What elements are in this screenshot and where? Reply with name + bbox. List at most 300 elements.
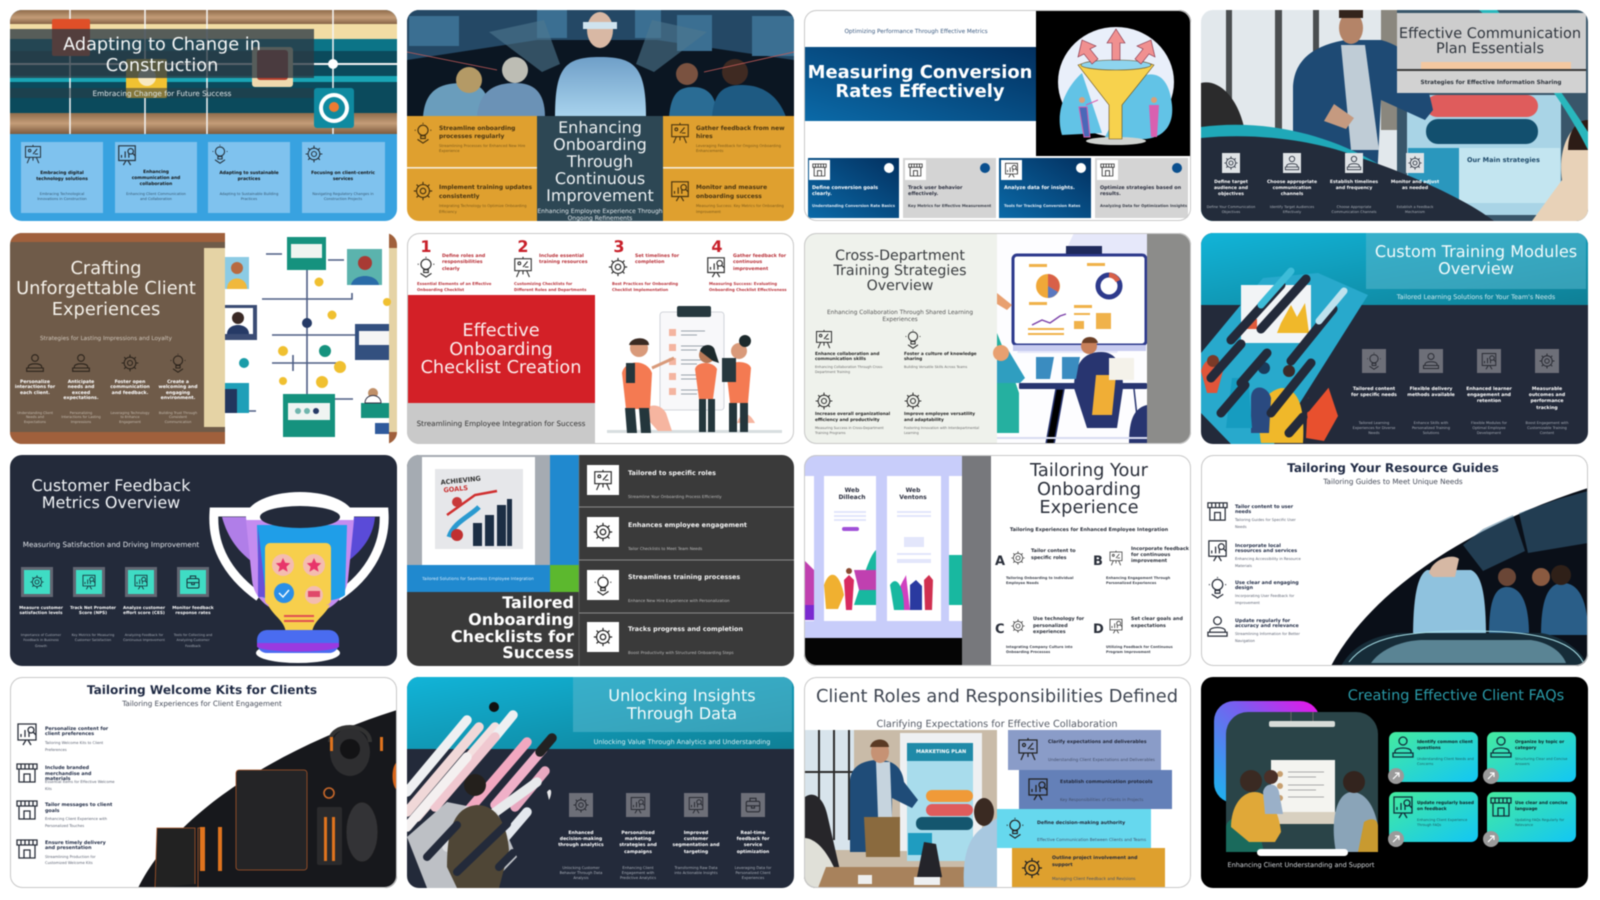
panel: training strategies: Training Programs [814,431,846,435]
title overlay: Embracing Change for Future Success [93,89,232,98]
panel: right steps: hires [696,133,713,140]
list: guide tips: Improvement [1235,601,1260,605]
panel: training strategies: Foster a culture of knowledge [904,351,977,357]
module labels: Optimal Employee [1472,426,1506,430]
list: welcome kit tips: Customized Welcome Kits [45,861,93,865]
tiles: FAQ practices: Identify common client [1417,739,1473,745]
step labels: Choose appropriate [1267,179,1317,185]
metric labels: Importance of Customer [21,633,62,637]
panel: brown intro: Personalizing [70,411,92,415]
metric labels: Growth [35,644,47,648]
slide: Custom Training Modules Overview [1201,233,1588,444]
grid: A B C D steps: Tailoring Onboarding to Individual [1006,576,1073,580]
list: welcome kit tips: Kits [45,787,52,791]
list: guide tips: Materials [1235,564,1252,568]
tiles: client responsibilities: Understanding Client Expectations and Deliverables [1048,757,1155,762]
tiles: four steps: Optimize strategies based on [1100,185,1182,191]
title panels: Effective Communication [1399,26,1581,42]
module labels: Tailored Learning [1358,421,1389,425]
image: customer journey flow diagram [225,233,397,444]
heading [23,476,199,549]
checklist steps: Measuring Success: Evaluating [709,281,777,286]
slide: Tailoring Your Onboarding Experience [798,455,1191,666]
panel: right steps [663,116,794,221]
metric labels: Analyze customer [123,605,166,610]
grid: A B C D steps: Employee Needs [1006,581,1039,585]
heading: Creating Effective Client FAQs [1348,688,1564,704]
module labels: Enhanced learner [1466,386,1512,392]
list: welcome kit tips: Tailor messages to client [45,802,113,808]
benefit labels: Enhanced [568,830,594,836]
heading panel: Effective [462,321,540,341]
grid: A B C D steps: Incorporate feedback [1131,546,1190,552]
grid: A B C D steps: specific roles [1031,555,1067,561]
benefit labels: Personalized [621,830,655,836]
slide: Adapting to Change in Construction [10,10,397,221]
title band: Overview [1438,259,1514,278]
list: guide tips: Incorporating User Feedback for [1235,594,1295,598]
module labels: for specific needs [1351,392,1397,398]
panel: right steps: Enhancements [696,149,724,153]
benefit labels: marketing [625,836,651,842]
subtitle: Optimizing Performance Through Effective Metrics [844,28,988,35]
checklist steps: Essential Elements of an Effective [417,281,492,286]
benefit labels: targeting [684,849,708,855]
screen label: Our Main strategies [1467,156,1540,164]
tiles: FAQ practices: Enhancing Client Experience [1417,818,1467,822]
panel: brown intro: welcoming and [158,384,198,390]
checklist steps: clearly [442,266,460,272]
panel: left steps: Implement training updates [439,184,533,191]
benefit labels: optimization [737,849,769,855]
panel: four strategies: Innovations in Construction [37,197,87,201]
panel: brown intro: Expectations [24,420,46,424]
heading: Tailoring Experiences for Client Engagement [121,699,282,708]
benefit labels: Leveraging Data for [735,866,772,870]
grid: A B C D steps: C [995,622,1005,637]
title band [407,677,794,749]
panel: brown intro: exceed [72,390,90,396]
panel: right steps: Improvement [696,210,721,214]
benefit labels: segmentation and [672,842,720,848]
panel: brown intro: Leveraging Technology [111,411,149,415]
tiles: FAQ practices [1388,732,1576,847]
benefit labels: feedback for [737,836,770,842]
step labels [1207,179,1440,214]
tiles: four steps: Analyze data for insights. [1004,185,1075,191]
metric tiles [21,567,209,597]
tiles: FAQ practices: Structuring Clear and Concise [1515,757,1567,761]
title band: Through Data [626,704,737,723]
heading band [804,47,1036,121]
step labels: Objectives [1222,210,1240,214]
checklist steps: 2 [517,237,529,256]
list: guide tips: Navigation [1235,639,1256,643]
subtitle band: Streamlining Employee Integration for Success [417,419,586,428]
heading [816,686,1178,730]
heading: Measuring Satisfaction and Driving Improvement [23,540,199,549]
title overlay [10,29,314,98]
module labels: retention [1477,398,1501,404]
tiles: client responsibilities: Key Responsibilities of Clients in Projects [1060,797,1143,802]
heading: Tailoring Experiences for Enhanced Employee Integration [1010,527,1169,533]
grid: A B C D steps [995,546,1190,654]
slide: Cross-Department Training Strategies Overview [804,233,1191,444]
metric labels: Feedback [185,644,201,648]
list: guide tips: design [1235,585,1254,591]
checklist steps: responsibilities [442,259,483,265]
grid: A B C D steps: Integrating Company Culture into [1006,645,1073,649]
list: welcome kit tips: Streamlining Production for [45,855,96,859]
grid: A B C D steps: B [1093,554,1103,569]
panel: four strategies: communication and [132,175,180,181]
list: welcome kit tips: Include branded [45,765,90,771]
benefit labels: Transforming Raw Data [674,866,717,870]
heading [537,116,663,222]
list: welcome kit tips: Personalize content for [45,726,109,732]
grid: A B C D steps: expectations [1131,623,1166,629]
metric labels: Track Net Promoter [70,605,117,610]
metric labels: Key Metrics for Measuring [72,633,114,637]
slide: Tailored Onboarding Checklists for Success [407,455,794,666]
list: welcome kit tips: goals [45,808,60,814]
image: meeting photo with gradient frame [1214,701,1378,856]
module labels: Measurable [1532,386,1562,392]
panel: four strategies: Adapting to Sustainable Building [220,192,278,196]
benefit labels [558,830,772,880]
panel: training strategies: sharing [904,356,922,362]
step labels: Effectively [1283,210,1301,214]
panel: training strategies: Experiences [882,316,918,323]
panel: four strategies: Focusing on client-centric [311,170,375,176]
subtitle band [407,403,595,444]
title panels: Plan Essentials [1436,41,1544,57]
tiles: four steps: Analyzing Data for Optimization Insights [1100,203,1188,208]
grid: A B C D steps: Onboarding Processes [1006,650,1050,654]
panel: brown intro: Needs and [26,415,44,419]
heading: Tailoring Your Resource Guides [1287,461,1499,475]
benefit labels: campaigns [624,849,652,855]
tiles: FAQ practices: Through FAQs [1416,823,1441,827]
checklist steps: continuous [733,259,762,265]
list: welcome kit tips: Enhancing Client Experience with [45,817,108,821]
panel: four strategies: Enhancing [143,169,169,175]
tiles: FAQ practices: Concerns [1417,762,1433,766]
heading: Experience [1039,497,1139,518]
list: four benefits [579,455,794,666]
checklist steps: Set timelines for [635,253,680,259]
panel: training strategies: Overview [867,278,933,294]
step labels: Monitor and adjust [1391,179,1440,185]
image: team around holographic table [1331,488,1588,666]
module labels: Boost Engagement with [1526,421,1568,425]
list: four benefits: Boost Productivity with Structured Onboarding Steps [628,650,734,655]
step labels: Define Your Communication [1207,205,1255,209]
tiles: client responsibilities: Outline project involvement and [1052,855,1137,861]
image: trophy illustration [214,492,384,663]
checklist steps: Checklist Implementation [612,287,668,292]
panel: training strategies: Fostering Innovation with Interdepartmental [904,426,979,430]
heading: Through [566,152,633,171]
checklist steps: Onboarding Checklist Effectiveness [709,287,787,292]
panel: four strategies: Practices [241,197,257,201]
checklist steps: 4 [711,237,723,256]
panel: four strategies: technology solutions [36,176,88,182]
heading: Ongoing Refinements [568,215,632,222]
panel: left steps: consistently [439,193,480,200]
tiles: FAQ practices: Updating FAQs Regularly for [1515,818,1565,822]
title band: Unlocking Value Through Analytics and Understanding [594,738,770,746]
image: mobile web mockups: Web [845,487,860,494]
image: presenter with marketing plan: MARKETING PLAN [916,749,966,755]
panel: left steps [407,116,537,221]
list: guide tips: accuracy and relevance [1235,623,1299,629]
heading band: Measuring Conversion [808,62,1032,83]
panel: left steps: Streamline onboarding [439,125,515,132]
heading band: Rates Effectively [835,81,1005,102]
grid: A B C D steps: Enhancing Engagement Through [1106,576,1171,580]
benefit labels: Experiences [742,876,764,880]
title band [1201,233,1588,305]
benefit labels: Predictive Analytics [620,876,656,880]
heading: Tailoring Your [1029,460,1149,481]
list: four benefits: Streamlines training processes [628,573,740,581]
heading: Enhancing Employee Experience Through [537,208,663,215]
panel: brown intro: Foster open [115,379,145,385]
module labels: methods available [1407,392,1455,398]
tiles: client responsibilities: support [1052,862,1073,868]
icons row [1362,349,1559,373]
decorative gray band [962,455,991,666]
panel: four strategies: collaboration [140,181,172,187]
list: four benefits: Enhance New Hire Experience with Personalization [628,598,730,603]
panel: brown intro: Personalize [20,379,50,385]
tiles: FAQ practices: Relevance [1515,823,1533,827]
image: team with a checklist [607,306,782,433]
list: four benefits: Streamline Your Onboarding Process Efficiently [628,494,722,499]
heading: Continuous [555,169,645,188]
title band: Tailored Learning Solutions for Your Team's Needs [1396,293,1556,301]
module labels: Enhance Skills with [1414,421,1448,425]
tiles: FAQ practices: Use clear and concise [1515,800,1568,806]
step labels: audience and [1214,185,1248,191]
checklist steps: Include essential [539,253,584,259]
tiles: client responsibilities [997,730,1172,888]
heading panel: Checklist Creation [421,358,581,378]
list: guide tips: Update regularly for [1235,618,1291,624]
tiles: four steps: Tools for Tracking Conversion Rates [1004,203,1081,208]
metric labels: satisfaction levels [20,610,63,615]
benefit labels: decision-making [560,836,602,842]
benefit labels: Improved [684,830,708,836]
heading: Enhancing [558,118,642,137]
panel: right steps: Gather feedback from new [696,125,785,132]
step labels: communication [1273,185,1311,191]
image: presenter with marketing plan [804,730,997,888]
benefit labels: strategies and [619,842,657,848]
panel: brown intro: interactions for [15,384,56,390]
heading [1287,461,1499,486]
heading [1010,460,1169,533]
grid: A B C D steps: experiences [1033,629,1066,635]
tiles: client responsibilities: Establish communication protocols [1060,779,1153,785]
metric labels: Customer Satisfaction [75,638,111,642]
image: mobile web mockups: Ventons [899,494,927,501]
slide: Effective Onboarding Checklist Creation [407,233,794,444]
tiles: four steps: results. [1100,191,1121,197]
metric labels: Monitor feedback [172,605,214,610]
grid: A B C D steps: Tailor content to [1031,548,1076,554]
heading: Client Roles and Responsibilities Defined [816,686,1178,707]
list: welcome kit tips: client preferences [45,731,94,737]
slide: Measuring Conversion Rates Effectively [804,10,1191,221]
panel: four strategies: Embracing digital [40,170,84,176]
grid: A B C D steps: Personalized Experiences [1106,581,1156,585]
heading panel: Onboarding [449,340,553,360]
module labels: performance [1530,398,1564,404]
list: four benefits: Tailor Checklists to Meet Team Needs [627,546,702,551]
module labels: engagement and [1467,392,1511,398]
wave band [1201,125,1494,221]
panel: training strategies: Increase overall organizational [815,411,891,417]
benefit labels: Enhancing Client [622,866,654,870]
benefit labels: customer [684,836,709,842]
tiles: four steps: clearly. [812,191,832,197]
metric labels: Tools for Collecting and [173,633,212,637]
slide: Enhancing Onboarding Through Continuous Improvement [407,10,794,222]
module labels: outcomes and [1529,392,1565,398]
tiles: four steps: Define conversion goals [812,185,878,191]
heading [451,593,574,662]
panel: training strategies: and adaptability [904,417,944,423]
image: achieving goals poster: ACHIEVING [440,475,481,487]
image: stripe-masked analyst collage [407,702,552,888]
metric labels: Feedback in Business [23,638,59,642]
grid: A B C D steps: Utilizing Feedback for Continuous [1106,645,1173,649]
image: achieving goals poster [407,455,550,565]
image: stripe-masked team collage [1201,271,1368,444]
heading: Tailoring Welcome Kits for Clients [87,683,317,697]
list: guide tips: resources and services [1235,548,1297,554]
panel: brown intro: to Enhance [120,415,140,419]
metric labels: Continuous Improvement [123,638,166,642]
heading: Metrics Overview [42,493,180,512]
list: guide tips: Tailor content to user [1235,504,1294,510]
tiles: client responsibilities: Clarify expectations and deliverables [1048,739,1147,745]
tiles: client responsibilities: Effective Communication Between Clients and Teams [1037,837,1146,842]
title panels: Strategies for Effective Information Sharing [1421,79,1561,86]
slide: Client Roles and Responsibilities Defined [804,677,1191,888]
panel: brown intro: each client. [20,390,50,396]
list: four benefits: Tailored to specific roles [628,469,716,477]
panel: brown intro: Unforgettable Client [16,278,196,299]
panel: left steps: Streamlining Processes for Enhanced New Hire [439,144,526,148]
grid: A B C D steps: Set clear goals and [1131,616,1183,622]
panel: left steps: Integrating Technology to Optimize Onboarding [439,204,527,208]
panel: training strategies: Enhancing Collaboration Through Shared Learning [827,309,973,316]
panel: brown intro: Create a [167,379,189,385]
tiles: four steps: Track user behavior [908,185,963,191]
panel: left steps: processes regularly [439,133,504,140]
title panels [1397,13,1586,93]
grid: A B C D steps: D [1093,622,1104,637]
panel: four strategies: Embracing Technological [40,192,84,196]
list: guide tips: needs [1235,509,1251,515]
list: guide tips [1208,503,1302,643]
benefit labels: Analysis [573,876,589,880]
tiles: FAQ practices: category [1515,745,1537,751]
image: mobile web mockups: Web [906,487,921,494]
module labels: Experiences for Diverse [1353,426,1396,430]
caption: Enhancing Client Understanding and Support [1228,861,1375,869]
checklist steps: Best Practices for Onboarding [612,281,678,286]
heading: Success [502,643,574,662]
panel: brown intro: Communication [165,420,191,424]
tiles: client responsibilities: Managing Client Feedback and Revisions [1052,876,1136,881]
panel: right steps: Measuring Success: Key Metrics for Onboarding [696,204,784,208]
list: guide tips: Tailoring Guides for Specific User [1234,518,1296,522]
tiles: FAQ practices: Organize by topic or [1515,739,1565,745]
module labels: Tailored content [1353,386,1396,392]
slide: Effective Communication Plan Essentials [1201,10,1588,221]
list: welcome kit tips [17,724,115,865]
heading: Onboarding [468,610,574,629]
slide: Crafting Unforgettable Client Experiences [10,233,397,444]
grid: A B C D steps: Use technology for [1033,616,1085,622]
benefit labels: through analytics [558,842,604,848]
panel: four strategies: Enhancing Client Communication [126,192,186,196]
panel: right steps: Monitor and measure [696,184,767,191]
step labels: as needed [1402,185,1428,191]
metric labels: Score (NPS) [79,610,107,615]
tiles: FAQ practices: questions [1417,745,1441,751]
heading: Customer Feedback [32,476,191,495]
tiles: client responsibilities: Define decision-making authority [1037,820,1125,826]
panel: brown intro: Understanding Client [17,411,54,415]
panel: left steps: Efficiency [439,210,458,214]
tiles: FAQ practices: on feedback [1417,806,1447,812]
image: achieving goals poster: GOALS [443,484,469,494]
panel: training strategies [804,233,997,444]
tiles: FAQ practices: Update regularly based [1417,800,1474,806]
panel: brown intro: environment. [161,395,196,401]
benefit labels: Engagement with [622,871,655,875]
list: welcome kit tips: Preferences [45,748,67,752]
heading [87,683,317,708]
list: guide tips: Streamlining Information for Better [1235,632,1300,636]
panel: brown intro: Anticipate [68,379,94,385]
list: guide tips: Incorporate local [1235,543,1281,549]
panel: brown intro: expectations. [63,395,99,401]
step labels: Identify Target Audiences [1270,205,1314,209]
checklist steps: Different Roles and Departments [514,287,587,292]
panel: training strategies: Department Training [815,370,850,374]
panel: training strategies: Enhancing Collaboration Through Cross- [815,365,884,369]
module labels: Flexible delivery [1410,386,1452,392]
panel: four strategies: services [333,176,354,182]
module labels: Development [1477,431,1502,435]
list: welcome kit tips: materials [45,776,71,782]
panel: brown intro: and feedback. [112,390,149,396]
module labels: Content [1540,431,1555,435]
panel: training strategies: Measuring Success in Cross-Department [815,426,884,430]
panel: training strategies: Building Versatile Skills Across Teams [904,365,967,369]
list: guide tips: Use clear and engaging [1235,580,1299,586]
checklist steps: training resources [539,259,588,265]
icons row [1222,153,1424,173]
checklist steps: improvement [733,266,769,272]
heading: Tailoring Guides to Meet Unique Needs [1322,477,1463,486]
